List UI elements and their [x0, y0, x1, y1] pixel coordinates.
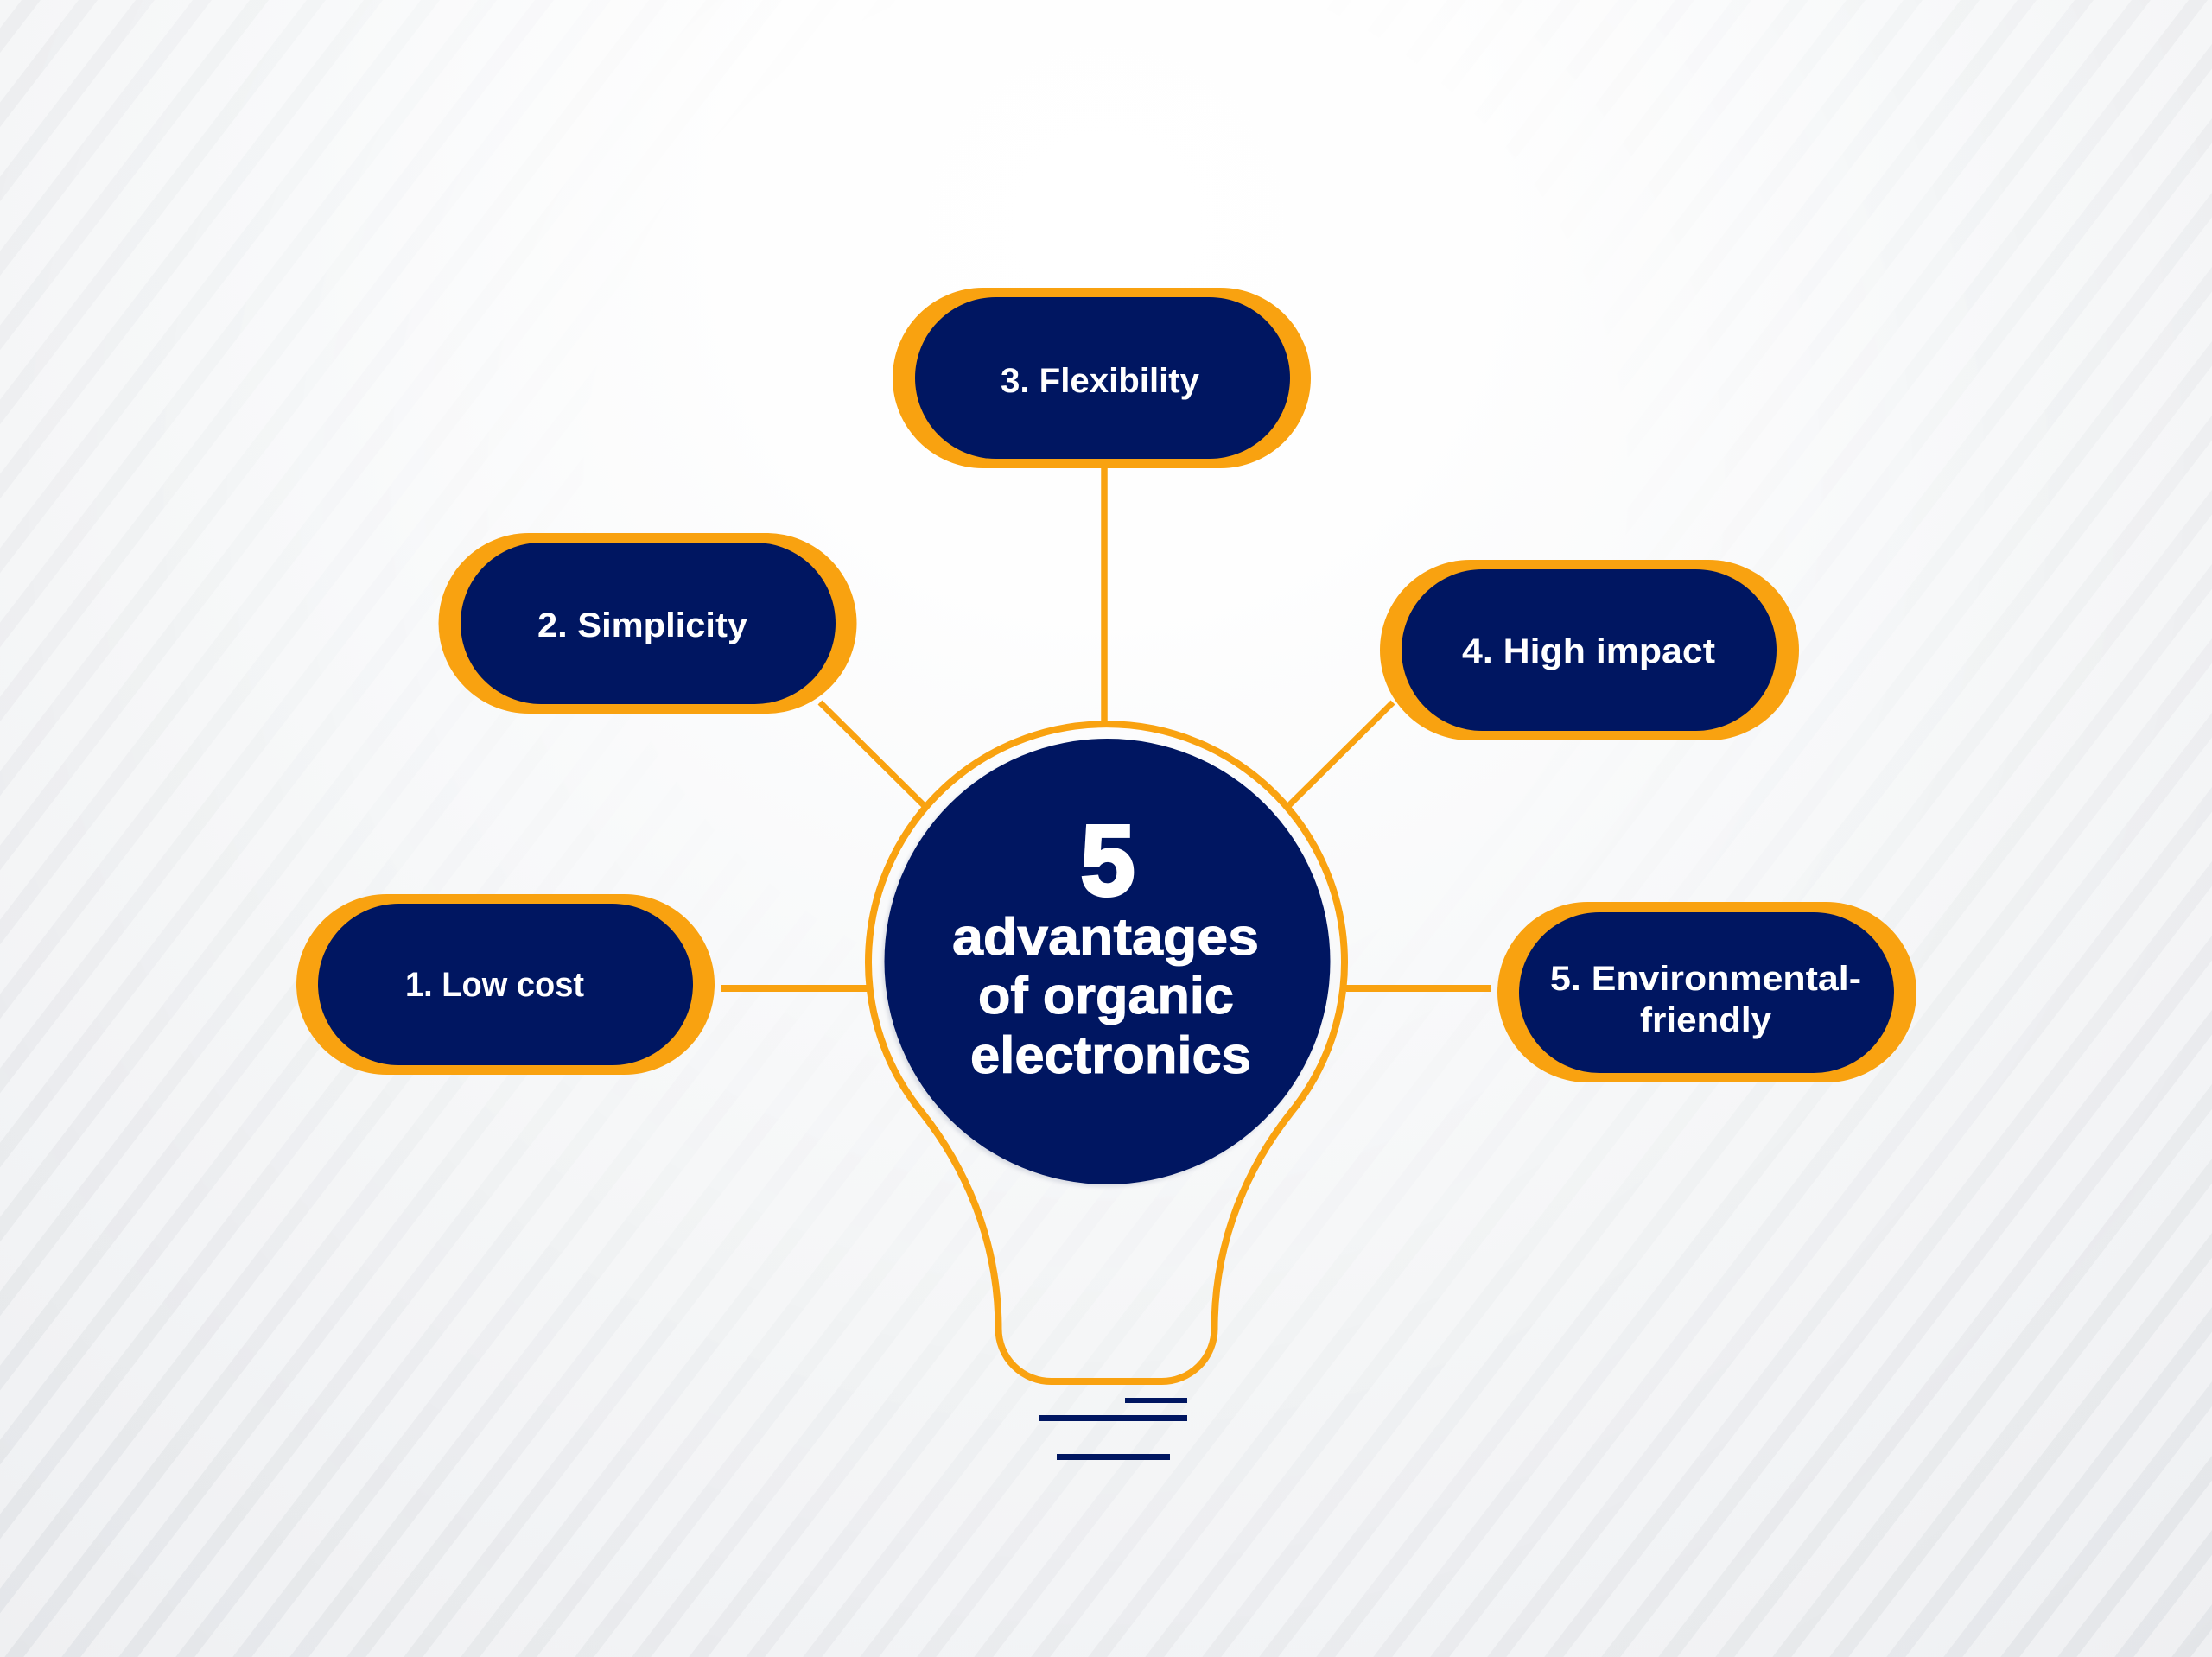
connector: 5 Environmental-friendly — [1346, 985, 1491, 992]
icon: bulb base lines — [1039, 1398, 1187, 1460]
connector: 3 Flexibility — [1101, 468, 1108, 724]
title text: electronics — [970, 1026, 1251, 1084]
connector: 1 Low cost — [721, 985, 868, 992]
panel: 5. Environmental-friendly — [1497, 902, 1916, 1082]
panel: 4. High impact: 4. High impact — [1462, 632, 1715, 670]
title text: of organic — [978, 967, 1234, 1025]
panel: 1. Low cost — [296, 894, 715, 1075]
panel: 2. Simplicity: 2. Simplicity — [537, 606, 748, 644]
panel: 4. High impact — [1380, 560, 1799, 740]
panel: 3. Flexibility — [893, 288, 1311, 468]
panel: 2. Simplicity — [439, 533, 857, 714]
title number: 5 — [1080, 804, 1135, 917]
panel: 5. Environmental-friendly: friendly — [1640, 1001, 1772, 1039]
connector: 4 High impact — [1289, 702, 1393, 805]
title text — [952, 908, 1259, 1084]
panel: 3. Flexibility: 3. Flexibility — [1001, 362, 1200, 400]
panel: 5. Environmental-friendly: 5. Environmental- — [1550, 960, 1861, 998]
title text: advantages — [952, 908, 1259, 966]
central circle with title — [882, 739, 1331, 1187]
icon: light bulb outline — [868, 724, 1344, 1381]
panel: 1. Low cost: 1. Low cost — [405, 966, 584, 1004]
connector: 2 Simplicity — [820, 702, 924, 805]
